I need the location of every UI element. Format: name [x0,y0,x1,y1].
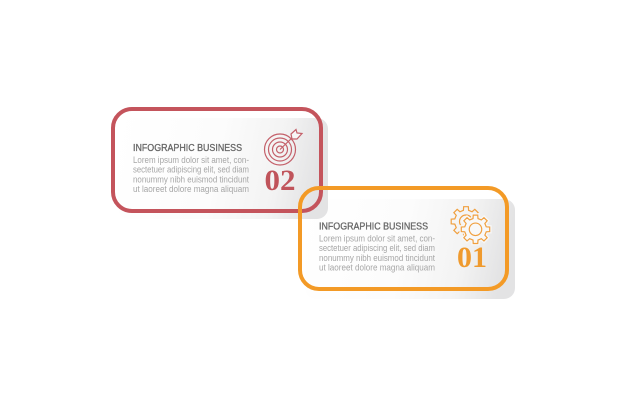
small gear [461,215,490,244]
icon: gears [451,207,490,244]
text block: step 02: ut laoreet dolore magna aliquam [133,184,249,194]
heading: step 02: INFOGRAPHIC BUSINESS [133,142,242,154]
panel background: step 01 [305,199,515,299]
panel background: step 02 [118,118,328,219]
panel: step 02 content [133,130,302,197]
text block: step 01: Lorem ipsum dolor sit amet, con- [319,234,435,244]
text block: step 01 [319,234,435,273]
text block: step 02: sectetuer adipiscing elit, sed diam [133,165,249,175]
text block: step 01: sectetuer adipiscing elit, sed diam [319,243,435,253]
text block: step 01: nonummy nibh euismod tincidunt [319,253,435,263]
large gear [451,207,481,236]
text block: step 02 [133,155,249,194]
number: 02: 02 [264,164,296,197]
text block: step 01: ut laoreet dolore magna aliquam [319,263,435,273]
rounded outline: step 01 [300,188,507,289]
rounded outline: step 02 [113,109,321,211]
small gear halo [461,215,490,244]
icon: target with arrow [264,130,302,165]
heading: step 01: INFOGRAPHIC BUSINESS [319,220,428,232]
text block: step 02: nonummy nibh euismod tincidunt [133,174,249,184]
text block: step 02: Lorem ipsum dolor sit amet, con- [133,155,249,165]
panel: step 01 content [319,207,490,274]
number: 01: 01 [457,241,487,274]
